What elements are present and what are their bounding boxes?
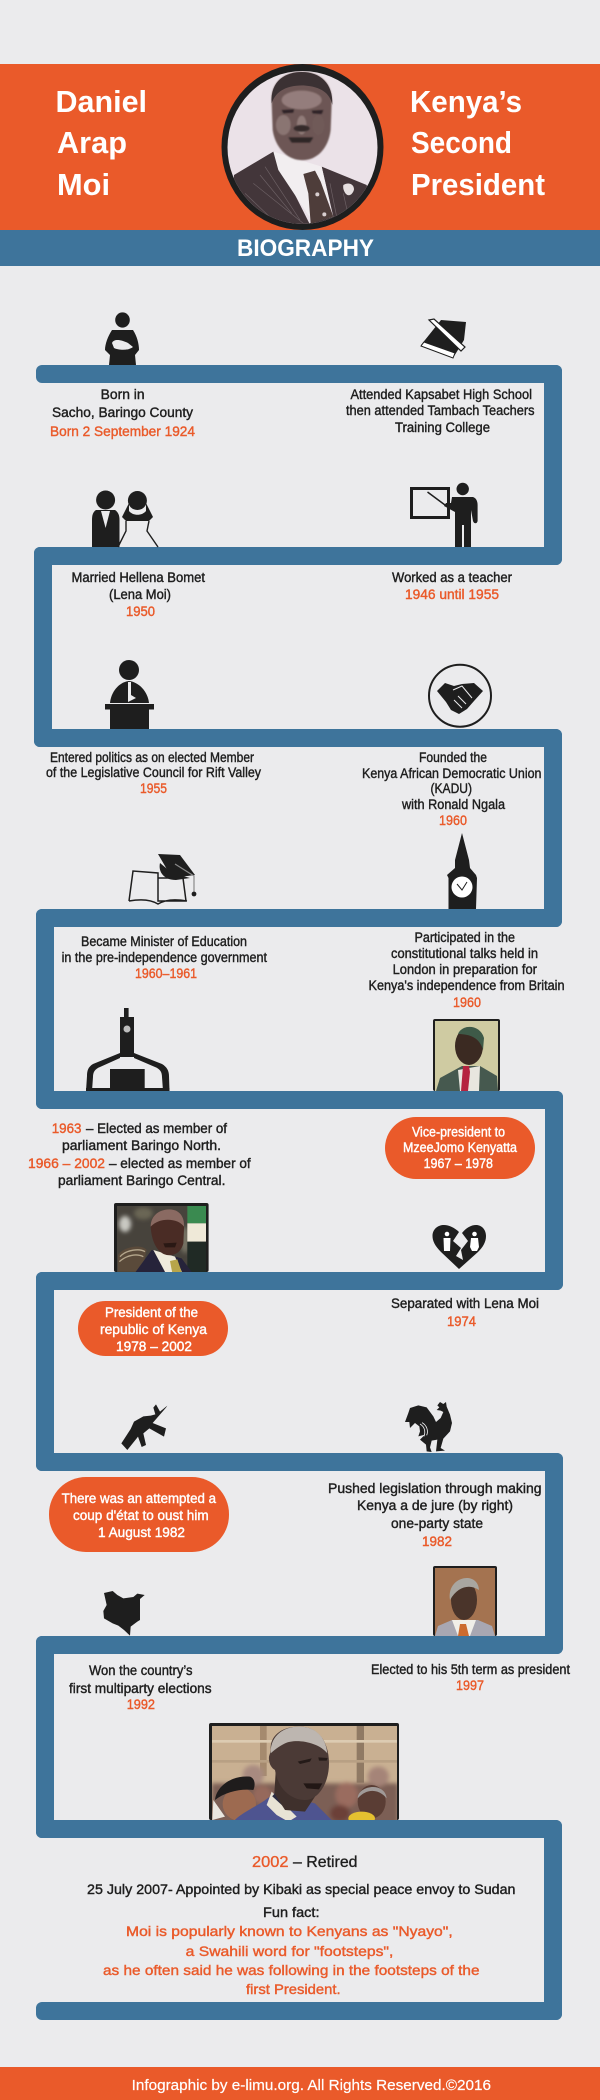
text: born: Sacho, Baringo County (52, 405, 193, 420)
text: separated: Separated with Lena Moi (391, 1296, 539, 1311)
callout: vice-president: 1967 – 1978 (424, 1156, 493, 1171)
text: minister: in the pre-independence government (62, 950, 267, 965)
text: fun fact: Fun fact: (263, 1904, 320, 1920)
icon: rifle (121, 1404, 167, 1450)
icon: bride and groom (92, 490, 158, 547)
text: London talks: London in preparation for (393, 962, 537, 977)
footer: Infographic by e-limu.org. All Rights Reserved.©2016 (132, 2077, 491, 2094)
text: married: 1950 (126, 604, 155, 619)
text: KADU: (KADU) (430, 781, 472, 796)
text: politics (46, 750, 261, 796)
text: minister: Became Minister of Education (81, 934, 247, 949)
milestone: London talks (368, 833, 564, 1010)
text: peace envoy: 25 July 2007- Appointed by Kibaki as special peace envoy to Sudan (87, 1881, 516, 1897)
text: KADU: 1960 (439, 813, 467, 828)
icon: teacher at board (412, 483, 478, 547)
callout: attempted coup: 1 August 1982 (98, 1525, 185, 1540)
icon: broken heart (432, 1225, 486, 1269)
text: retired: 2002 (252, 1854, 289, 1871)
text: minister (62, 934, 267, 981)
photo: Moi with flag (114, 1203, 209, 1272)
icon: rooster (405, 1402, 452, 1452)
text: married (72, 570, 205, 619)
text: parliament terms: 1966 – 2002 (28, 1156, 105, 1171)
text: parliament terms: parliament Baringo North. (62, 1138, 221, 1153)
panel: retirement and fun fact (87, 1854, 516, 1997)
icon: mother and baby (105, 312, 139, 365)
text: London talks: constitutional talks held in (391, 946, 538, 961)
text: born: Born in (101, 387, 145, 402)
milestone: multiparty elections (69, 1591, 212, 1712)
text: fun fact (103, 1904, 480, 1997)
photo: Mwai Kibaki (433, 1566, 497, 1636)
callout: president: 1978 – 2002 (116, 1339, 192, 1354)
text: KADU (362, 750, 542, 828)
text: fifth term: 1997 (456, 1678, 484, 1693)
text: one-party state: one-party state (391, 1516, 483, 1531)
text: multiparty elections: Won the country’s (89, 1663, 193, 1678)
text: one-party state: Pushed legislation through making (328, 1481, 542, 1496)
title: Daniel Arap Moi: Daniel (56, 84, 147, 119)
text: retired: – Retired (293, 1854, 358, 1871)
text: teacher: 1946 until 1955 (405, 587, 499, 602)
text: London talks: 1960 (453, 995, 481, 1010)
title: Kenya's Second President: Second (411, 125, 512, 160)
text: married: (Lena Moi) (109, 587, 171, 602)
text: parliament terms: parliament Baringo Central. (58, 1173, 225, 1188)
text: fifth term: Elected to his 5th term as president (371, 1662, 570, 1677)
icon: map of Kenya (103, 1591, 145, 1636)
milestone: teacher (392, 483, 512, 602)
heading: biography: BIOGRAPHY (237, 235, 374, 262)
text: one-party state: 1982 (422, 1534, 452, 1549)
text: retired (252, 1854, 358, 1871)
timeline path (34, 365, 563, 2020)
text: school: Attended Kapsabet High School (350, 387, 532, 402)
text: London talks: Kenya's independence from Britain (368, 978, 564, 993)
photo: Ronald Ngala (433, 1019, 500, 1091)
header banner (0, 60, 600, 235)
callout: president (78, 1301, 228, 1356)
callout: president: President of the (105, 1305, 198, 1320)
photo: Moi in retirement (209, 1723, 399, 1820)
footer (0, 2067, 600, 2100)
title: Daniel Arap Moi: Moi (57, 167, 110, 202)
text: parliament terms (28, 1121, 251, 1188)
text: multiparty elections (69, 1663, 212, 1712)
milestone: married (72, 490, 205, 619)
title: Kenya's Second President: Kenya’s (410, 84, 522, 119)
text: fun fact: first President. (246, 1981, 341, 1997)
callout: vice-president (385, 1117, 535, 1179)
callout: attempted coup: There was an attempted a (62, 1491, 216, 1506)
milestone: KADU (362, 665, 542, 828)
text: one-party state (328, 1481, 542, 1549)
icon: Big Ben (447, 833, 477, 909)
text: politics: 1955 (140, 781, 167, 796)
text: married: Married Hellena Bomet (72, 570, 205, 585)
milestone: minister (62, 854, 267, 981)
title: Kenya's Second President (410, 84, 545, 202)
text: KADU: with Ronald Ngala (401, 797, 505, 812)
text: born: Born 2 September 1924 (50, 424, 195, 439)
text: one-party state: Kenya a de jure (by right) (357, 1498, 513, 1513)
text: parliament terms: 1963 (52, 1121, 82, 1136)
text: multiparty elections: 1992 (127, 1697, 155, 1712)
text: school: then attended Tambach Teachers (346, 403, 535, 418)
text: born (50, 387, 195, 439)
text: fun fact: as he often said he was following in the footsteps of the (103, 1962, 480, 1978)
text: teacher (392, 570, 512, 602)
title: Daniel Arap Moi (56, 84, 147, 202)
callout: attempted coup (49, 1477, 229, 1552)
icon: book and pencil (421, 319, 466, 358)
text: fun fact: Moi is popularly known to Kenyans as "Nyayo", (126, 1923, 453, 1939)
text: London talks: Participated in the (414, 930, 515, 945)
milestone: member of parliament (28, 1008, 500, 1188)
biography band (0, 230, 600, 266)
text: multiparty elections: first multiparty elections (69, 1681, 212, 1696)
text: politics: of the Legislative Council for Rift Valley (46, 765, 261, 780)
callout: vice-president: MzeeJomo Kenyatta (403, 1140, 517, 1155)
text: politics: Entered politics as on elected Member (50, 750, 254, 765)
text: KADU: Kenya African Democratic Union (362, 766, 542, 781)
text: school (346, 387, 535, 435)
text: fun fact: a Swahili word for "footsteps", (186, 1943, 393, 1959)
milestone: school (346, 319, 535, 435)
text: parliament terms: – elected as member of (109, 1156, 251, 1171)
title: Daniel Arap Moi: Arap (57, 125, 127, 160)
title: Kenya's Second President: President (411, 167, 545, 202)
text: minister: 1960–1961 (135, 966, 197, 981)
callout: vice-president: Vice-president to (412, 1124, 505, 1140)
icon: handshake in circle (429, 665, 491, 727)
icon: book and graduation cap (129, 854, 196, 904)
text: school: Training College (395, 420, 490, 435)
text: separated (391, 1296, 539, 1329)
milestone: born (50, 312, 195, 439)
text: London talks (368, 930, 564, 1010)
text: KADU: Founded the (419, 750, 487, 765)
icon: speaker at podium (105, 660, 154, 729)
text: separated: 1974 (447, 1314, 476, 1329)
text: parliament terms: – Elected as member of (86, 1121, 227, 1136)
portrait: Daniel arap Moi (220, 60, 390, 235)
milestone: one-party state (328, 1402, 542, 1549)
icon: Nyayo monument (86, 1008, 170, 1091)
milestone: separated (391, 1225, 539, 1329)
text: teacher: Worked as a teacher (392, 570, 512, 585)
text: fifth term (371, 1662, 570, 1693)
callout: president: republic of Kenya (100, 1322, 207, 1337)
milestone: politics (46, 660, 261, 796)
callout: attempted coup: coup d'état to oust him (73, 1508, 209, 1523)
